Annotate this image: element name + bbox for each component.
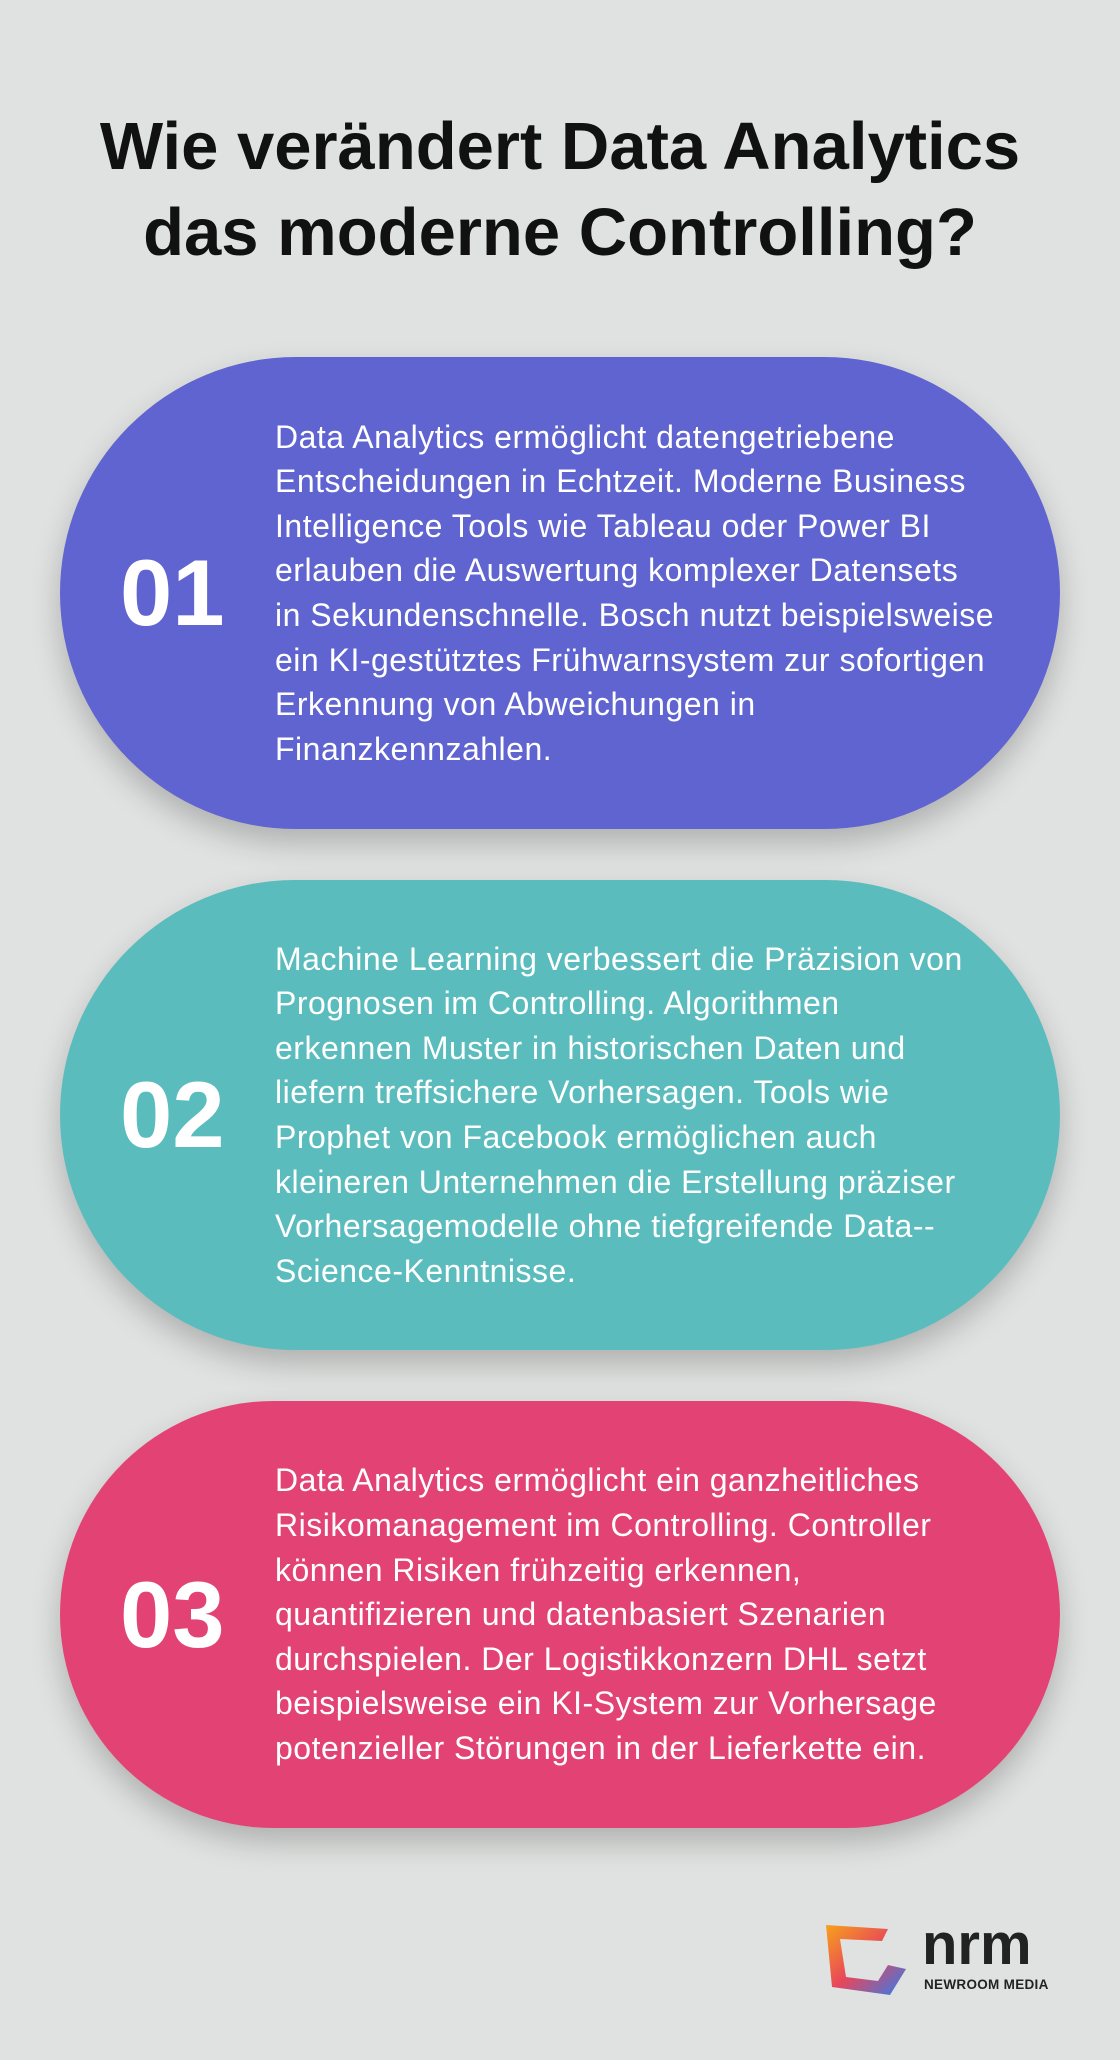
panel: 03 [60, 1401, 1060, 1828]
icon: logo mark [826, 1925, 906, 1995]
title: das moderne Controlling? [143, 195, 977, 270]
text 01: ein KI-gestütztes Frühwarnsystem zur sofortigen [275, 642, 985, 678]
text 03: Data Analytics ermöglicht ein ganzheitliches [275, 1462, 920, 1498]
text 01: erlauben die Auswertung komplexer Datensets [275, 552, 958, 588]
text 01: Data Analytics ermöglicht datengetriebene [275, 419, 895, 455]
logo text: nrm [922, 1912, 1032, 1977]
text 01 [275, 419, 994, 767]
text 02: liefern treffsichere Vorhersagen. Tools wie [275, 1074, 889, 1110]
text 02: erkennen Muster in historischen Daten und [275, 1030, 906, 1066]
text 01: Erkennung von Abweichungen in [275, 686, 756, 722]
text 01: Entscheidungen in Echtzeit. Moderne Business [275, 463, 966, 499]
text 03: durchspielen. Der Logistikkonzern DHL setzt [275, 1641, 927, 1677]
text 02: Prophet von Facebook ermöglichen auch [275, 1119, 877, 1155]
text 03: Risikomanagement im Controlling. Controller [275, 1507, 931, 1543]
text 03: potenzieller Störungen in der Lieferkette ein. [275, 1730, 926, 1766]
text 03: können Risiken frühzeitig erkennen, [275, 1552, 801, 1588]
text 02: Prognosen im Controlling. Algorithmen [275, 985, 840, 1021]
number 03: 03 [120, 1562, 225, 1666]
panel: 02 [60, 880, 1060, 1350]
logo: NEWROOM MEDIA [924, 1977, 1049, 1992]
panel: 01 [60, 357, 1060, 829]
text 02: Machine Learning verbessert die Präzision von [275, 941, 963, 977]
text 03: quantifizieren und datenbasiert Szenarien [275, 1596, 886, 1632]
text 02: Vorhersagemodelle ohne tiefgreifende Data-- [275, 1208, 935, 1244]
title [100, 109, 1020, 270]
title: Wie verändert Data Analytics [100, 109, 1020, 184]
number 01: 01 [120, 540, 225, 645]
text 02 [275, 941, 963, 1289]
logo [826, 1912, 1049, 1995]
text 01: in Sekundenschnelle. Bosch nutzt beispielsweise [275, 597, 994, 633]
text 02: kleineren Unternehmen die Erstellung präziser [275, 1164, 956, 1200]
text 01: Finanzkennzahlen. [275, 731, 552, 767]
text 02: Science-Kenntnisse. [275, 1253, 576, 1289]
text 03: beispielsweise ein KI-System zur Vorhersage [275, 1685, 937, 1721]
number 02: 02 [120, 1062, 225, 1167]
text 03 [275, 1462, 937, 1766]
text 01: Intelligence Tools wie Tableau oder Power BI [275, 508, 931, 544]
